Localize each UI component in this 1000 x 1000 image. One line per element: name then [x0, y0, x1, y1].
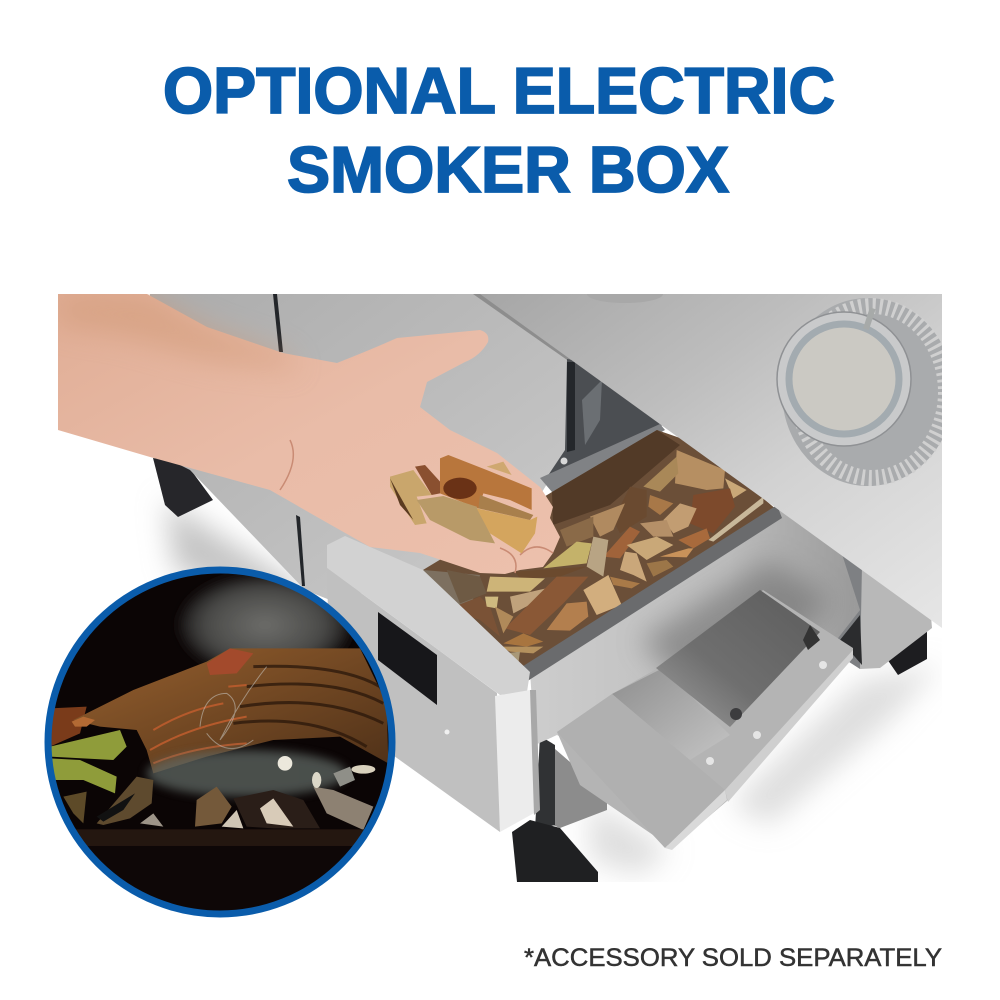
mushrooms and grill pieces — [97, 777, 153, 825]
rising smoke wisps — [200, 667, 267, 749]
drawer opening with wood chips — [423, 430, 777, 676]
finger creases — [280, 440, 553, 573]
title — [163, 54, 835, 206]
front caster and leg — [512, 736, 607, 882]
wood chips in drawer — [447, 450, 763, 663]
footnote: *ACCESSORY SOLD SEPARATELY — [524, 944, 942, 972]
drawer front face — [530, 510, 860, 744]
green vegetable — [50, 730, 127, 793]
background meat — [50, 707, 87, 747]
smoke haze over mushrooms — [147, 750, 347, 797]
cabinet doors — [150, 294, 570, 600]
title: OPTIONAL ELECTRIC — [163, 54, 835, 127]
drawer front rim — [520, 505, 782, 682]
meat slice — [73, 648, 388, 773]
smoke — [178, 574, 350, 662]
hinge bracket behind drawer — [540, 359, 665, 492]
ground shadows — [165, 500, 940, 875]
arm tan shading — [58, 294, 300, 370]
inset photo: smoked food — [40, 570, 400, 919]
title: SMOKER BOX — [287, 133, 729, 206]
arm and hand — [58, 294, 560, 574]
right side bracket and caster — [805, 530, 932, 675]
control dial — [777, 298, 954, 486]
meat rings — [233, 666, 383, 747]
drawer front shadow — [640, 560, 830, 680]
wood chips in hand — [390, 455, 537, 553]
back left caster — [153, 458, 213, 517]
left end block of drawer — [327, 536, 540, 832]
upper edge knob — [612, 294, 663, 303]
control panel — [480, 294, 942, 628]
grill bar — [76, 829, 364, 846]
inset blue ring — [48, 570, 392, 914]
hinged flap and recess — [557, 590, 853, 850]
photo: grill with smoker box drawer — [58, 285, 954, 882]
